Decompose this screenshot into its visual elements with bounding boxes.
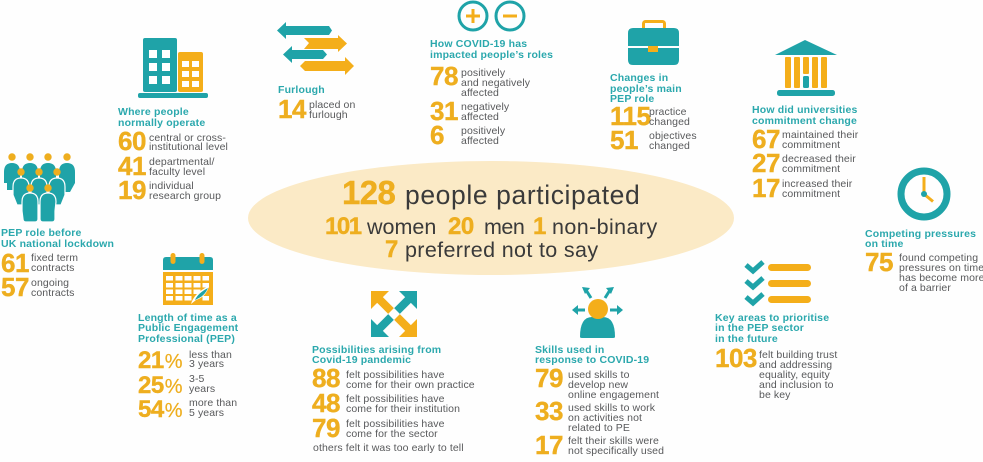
heading: Key areas to prioritise — [715, 312, 829, 324]
stat: 103: and addressing — [759, 359, 832, 371]
stat: 14: placed on — [309, 99, 355, 111]
stat: 41: faculty level — [149, 166, 205, 178]
panel: skills used — [535, 287, 664, 460]
stat: 79: online engagement — [568, 389, 659, 401]
heading: UK national lockdown — [1, 238, 114, 250]
stat: 79 — [535, 363, 659, 401]
heading: PEP role — [610, 93, 654, 105]
stat: 115 — [610, 101, 690, 131]
stat: 115: practice — [649, 106, 687, 118]
stat: 78: 78 — [430, 61, 458, 91]
stat: 61 — [1, 248, 78, 278]
stat: 19: research group — [149, 190, 221, 202]
stat: 31: negatively — [461, 101, 510, 113]
stat: 60: institutional level — [149, 141, 228, 153]
panel: where people normally operate — [118, 38, 228, 205]
stat: 75: pressures on time — [899, 262, 983, 274]
stat: 48: felt possibilities have — [346, 393, 445, 405]
stat: 19: 19 — [118, 175, 146, 205]
stat: 33: used skills to work — [568, 402, 656, 414]
icon: group of people — [4, 153, 75, 222]
stat: 54%: 54% — [138, 396, 183, 423]
stat: 33: related to PE — [568, 422, 630, 434]
stat: 17: felt their skills were — [568, 435, 659, 447]
icon: four outward arrows — [371, 291, 417, 337]
stat: 17 — [752, 173, 853, 203]
stat: 33: on activities not — [568, 412, 642, 424]
stat: 14: furlough — [309, 109, 348, 121]
stat: 41 — [118, 151, 215, 181]
stat: 79: come for the sector — [346, 428, 438, 440]
stat: 41: 41 — [118, 151, 146, 181]
panel: PEP role before lockdown — [1, 153, 114, 302]
stat: 75: of a barrier — [899, 282, 951, 294]
panel: length of time as PEP — [138, 253, 239, 423]
stat: 17: 17 — [752, 173, 780, 203]
stat: 60: central or cross- — [149, 132, 226, 144]
stat: 14: 14 — [278, 94, 307, 124]
icon: checklist — [746, 262, 811, 303]
stat: 115: changed — [649, 116, 690, 128]
stat: 78: affected — [461, 87, 499, 99]
stat: 21%: 21% — [138, 347, 183, 374]
heading: response to COVID-19 — [535, 354, 649, 366]
stat: 33 — [535, 396, 656, 434]
note: others felt it was too early to tell — [313, 442, 464, 454]
heading: impacted people’s roles — [430, 49, 553, 61]
stat: 6 — [430, 120, 506, 150]
stat: 31: 31 — [430, 96, 458, 126]
heading: How did universities — [752, 104, 858, 116]
stat: 51: objectives — [649, 130, 697, 142]
stat: 103 — [715, 343, 837, 401]
panel: competing pressures — [865, 171, 983, 294]
heading: on time — [865, 238, 904, 250]
heading: Length of time as a — [138, 312, 237, 324]
panel: universities commitment change — [752, 40, 859, 203]
stat: 103: equality, equity — [759, 369, 831, 381]
gender breakdown: non-binary — [552, 215, 658, 239]
stat: 19: individual — [149, 180, 194, 192]
stat: 79: 79 — [535, 363, 563, 393]
stat: 31 — [430, 96, 510, 126]
stat: 19 — [118, 175, 221, 205]
stat: 51: changed — [649, 140, 690, 152]
stat: 25% — [138, 372, 215, 399]
gender breakdown: 20 — [448, 213, 474, 240]
gender breakdown: men — [484, 215, 524, 239]
heading: people’s main — [610, 83, 682, 95]
stat: 31: affected — [461, 111, 499, 123]
central participants ellipse — [248, 161, 734, 275]
icon: clock — [901, 171, 947, 217]
stat: 61: contracts — [31, 262, 74, 274]
heading: Professional (PEP) — [138, 333, 235, 345]
stat: 79: develop new — [568, 379, 628, 391]
panel: changes in main PEP role — [610, 22, 697, 155]
heading: in the future — [715, 333, 778, 345]
stat: 88: felt possibilities have — [346, 369, 445, 381]
icon: plus and minus — [459, 2, 524, 30]
stat: 48 — [312, 388, 460, 418]
stat: 103: 103 — [715, 343, 757, 373]
stat: 54%: more than — [189, 397, 237, 409]
preferred not to say: preferred not to say — [405, 238, 598, 262]
stat: 27: 27 — [752, 148, 780, 178]
icon: calendar — [163, 253, 213, 305]
heading: in the PEP sector — [715, 322, 804, 334]
stat: 17: 17 — [535, 430, 563, 460]
stat: 88: 88 — [312, 363, 340, 393]
preferred not to say: 7 — [385, 236, 398, 263]
stat: 60: 60 — [118, 126, 146, 156]
stat: 51: 51 — [610, 125, 638, 155]
stat: 57: 57 — [1, 272, 29, 302]
stat: 103: be key — [759, 389, 791, 401]
heading: PEP role before — [1, 227, 82, 239]
heading: commitment change — [752, 115, 857, 127]
stat: 27 — [752, 148, 856, 178]
stat: 103: and inclusion to — [759, 379, 834, 391]
stat: 17: not specifically used — [568, 445, 664, 457]
heading: Public Engagement — [138, 322, 239, 334]
stat: 41: departmental/ — [149, 156, 215, 168]
heading: Possibilities arising from — [312, 344, 441, 356]
stat: 88: come for their own practice — [346, 379, 475, 391]
stat: 67: commitment — [782, 139, 840, 151]
stat: 48: 48 — [312, 388, 340, 418]
stat: 79 — [312, 413, 445, 443]
stat: 103: felt building trust — [759, 349, 837, 361]
heading: normally operate — [118, 117, 205, 129]
stat: 60 — [118, 126, 228, 156]
stat: 57 — [1, 272, 74, 302]
stat: 27: commitment — [782, 163, 840, 175]
stat: 25%: years — [189, 383, 215, 395]
stat: 75: has become more — [899, 272, 983, 284]
panel: key areas to prioritise — [715, 262, 837, 401]
panel: furlough — [277, 22, 355, 124]
stat: 27: decreased their — [782, 153, 856, 165]
heading: Covid-19 pandemic — [312, 354, 411, 366]
stat: 67: maintained their — [782, 129, 859, 141]
panel: possibilities arising — [312, 291, 475, 454]
stat: 75: 75 — [865, 247, 893, 277]
stat: 57: contracts — [31, 287, 74, 299]
gender breakdown: 101 — [325, 213, 362, 240]
stat: 88 — [312, 363, 475, 393]
stat: 21% — [138, 347, 232, 374]
icon: person with arrows — [572, 287, 623, 338]
gender breakdown: 1 — [533, 213, 546, 240]
stat: 6: 6 — [430, 120, 444, 150]
icon: university building — [775, 40, 837, 96]
stat: 67: 67 — [752, 124, 780, 154]
stat: 75: found competing — [899, 252, 978, 264]
stat: 67 — [752, 124, 859, 154]
stat: 17 — [535, 430, 664, 460]
stat: 6: positively — [461, 125, 506, 137]
icon: buildings — [138, 38, 208, 98]
stat: 25%: 3-5 — [189, 373, 205, 385]
stat: 78: and negatively — [461, 77, 531, 89]
heading: Where people — [118, 106, 189, 118]
stat: 79: used skills to — [568, 369, 630, 381]
stat: 115: 115 — [610, 101, 650, 131]
stat: 21%: 3 years — [189, 358, 224, 370]
heading: Skills used in — [535, 344, 604, 356]
stat: 21%: less than — [189, 349, 232, 361]
stat: 57: ongoing — [31, 277, 69, 289]
stat: 61: 61 — [1, 248, 29, 278]
heading: Competing pressures — [865, 228, 976, 240]
icon: swap arrows — [277, 22, 354, 75]
stat: 78: positively — [461, 67, 506, 79]
stat: 17: increased their — [782, 178, 853, 190]
stat: 51 — [610, 125, 697, 155]
stat: 17: commitment — [782, 188, 840, 200]
total participants: 128 — [342, 174, 396, 211]
stat: 54% — [138, 396, 237, 423]
stat: 48: come for their institution — [346, 403, 460, 415]
heading: Furlough — [278, 84, 325, 96]
stat: 78 — [430, 61, 531, 99]
icon: briefcase — [628, 22, 679, 65]
stat: 25%: 25% — [138, 372, 183, 399]
stat: 79: felt possibilities have — [346, 418, 445, 430]
stat: 75 — [865, 247, 983, 294]
stat: 33: 33 — [535, 396, 563, 426]
heading: How COVID-19 has — [430, 38, 527, 50]
stat: 61: fixed term — [31, 252, 78, 264]
stat: 79: 79 — [312, 413, 340, 443]
total participants: people participated — [405, 180, 640, 210]
stat: 6: affected — [461, 135, 499, 147]
panel: how COVID-19 impacted roles — [430, 2, 553, 150]
stat: 54%: 5 years — [189, 407, 224, 419]
heading: Changes in — [610, 72, 668, 84]
gender breakdown: women — [366, 215, 436, 239]
stat: 14 — [278, 94, 355, 124]
